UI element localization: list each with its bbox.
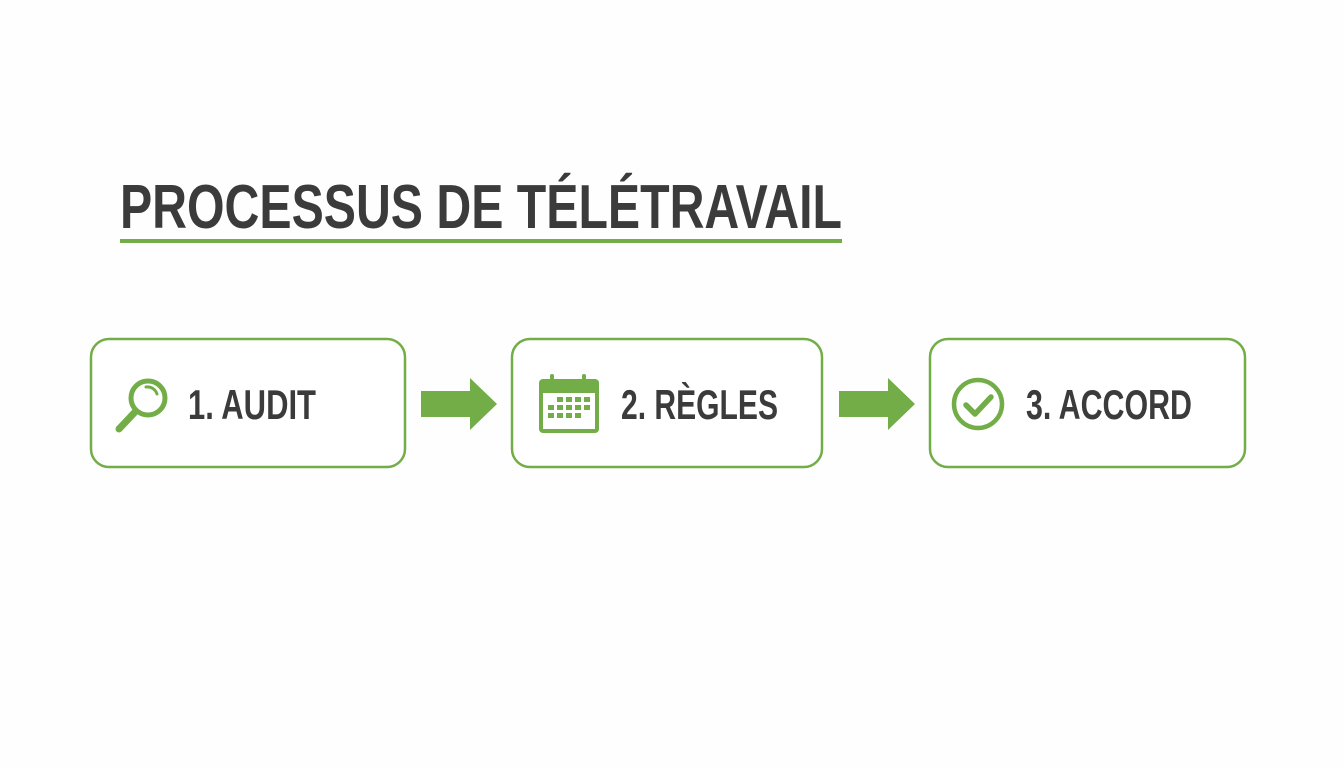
icon: check circle	[954, 380, 1002, 428]
title: PROCESSUS DE TÉLÉTRAVAIL	[120, 173, 842, 242]
icon: calendar	[539, 374, 599, 433]
panel: step 2 regles	[512, 339, 822, 467]
icon: magnifier	[119, 381, 165, 429]
label: 2. REGLES: 2. RÈGLES	[621, 381, 778, 428]
arrow 1	[421, 378, 497, 430]
panel: step 1 audit	[91, 339, 405, 467]
arrow 2	[839, 378, 915, 430]
label: 3. ACCORD: 3. ACCORD	[1026, 381, 1192, 428]
label: 1. AUDIT: 1. AUDIT	[188, 381, 316, 428]
panel: step 3 accord	[930, 339, 1245, 467]
